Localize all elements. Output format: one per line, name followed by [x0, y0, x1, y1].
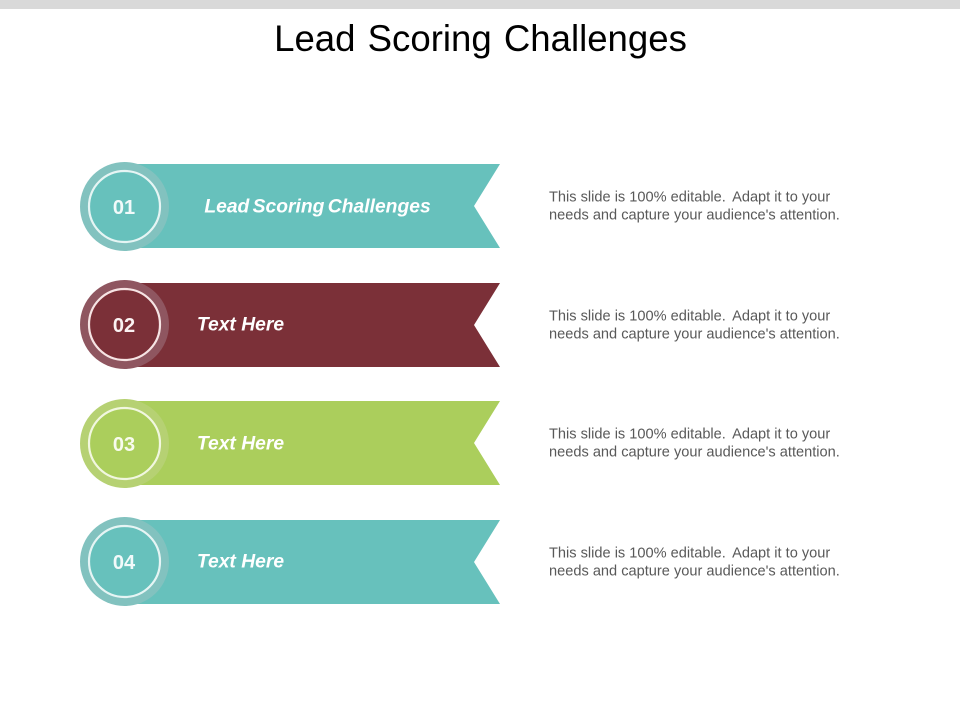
badge 02 — [80, 280, 169, 369]
ribbon label 02: Text Here — [197, 314, 284, 336]
description 02: needs and capture your audience's attention. — [549, 326, 840, 342]
panel: row 03 — [80, 399, 840, 488]
ribbon 02 — [124, 283, 500, 367]
description 04: needs and capture your audience's attention. — [549, 564, 840, 580]
ribbon 04 — [124, 520, 500, 604]
ribbon 03 — [124, 401, 500, 485]
panel: row 01 — [80, 162, 840, 251]
ribbon label 03: Text Here — [197, 434, 284, 454]
badge 04: 04 — [113, 552, 136, 574]
badge 01: 01 — [113, 197, 135, 219]
description 03: This slide is 100% editable. Adapt it to your — [549, 426, 830, 442]
description 02: This slide is 100% editable. Adapt it to your — [549, 308, 830, 324]
badge 01 — [80, 162, 169, 251]
ribbon 01 — [124, 164, 500, 248]
panel: row 02 — [80, 280, 840, 369]
top bar — [0, 0, 960, 9]
description 01: This slide is 100% editable. Adapt it to your — [549, 190, 830, 206]
panel: row 04 — [80, 517, 840, 606]
description 03: needs and capture your audience's attention. — [549, 444, 840, 460]
badge 04 — [80, 517, 169, 606]
ribbon label 01: Lead Scoring Challenges — [204, 196, 431, 218]
badge 03: 03 — [113, 434, 135, 456]
description 01: needs and capture your audience's attention. — [549, 208, 840, 224]
badge 03 — [80, 399, 169, 488]
description 04: This slide is 100% editable. Adapt it to your — [549, 546, 830, 562]
badge 02: 02 — [113, 315, 135, 337]
ribbon label 04: Text Here — [197, 552, 284, 572]
title: Lead Scoring Challenges — [274, 18, 687, 59]
